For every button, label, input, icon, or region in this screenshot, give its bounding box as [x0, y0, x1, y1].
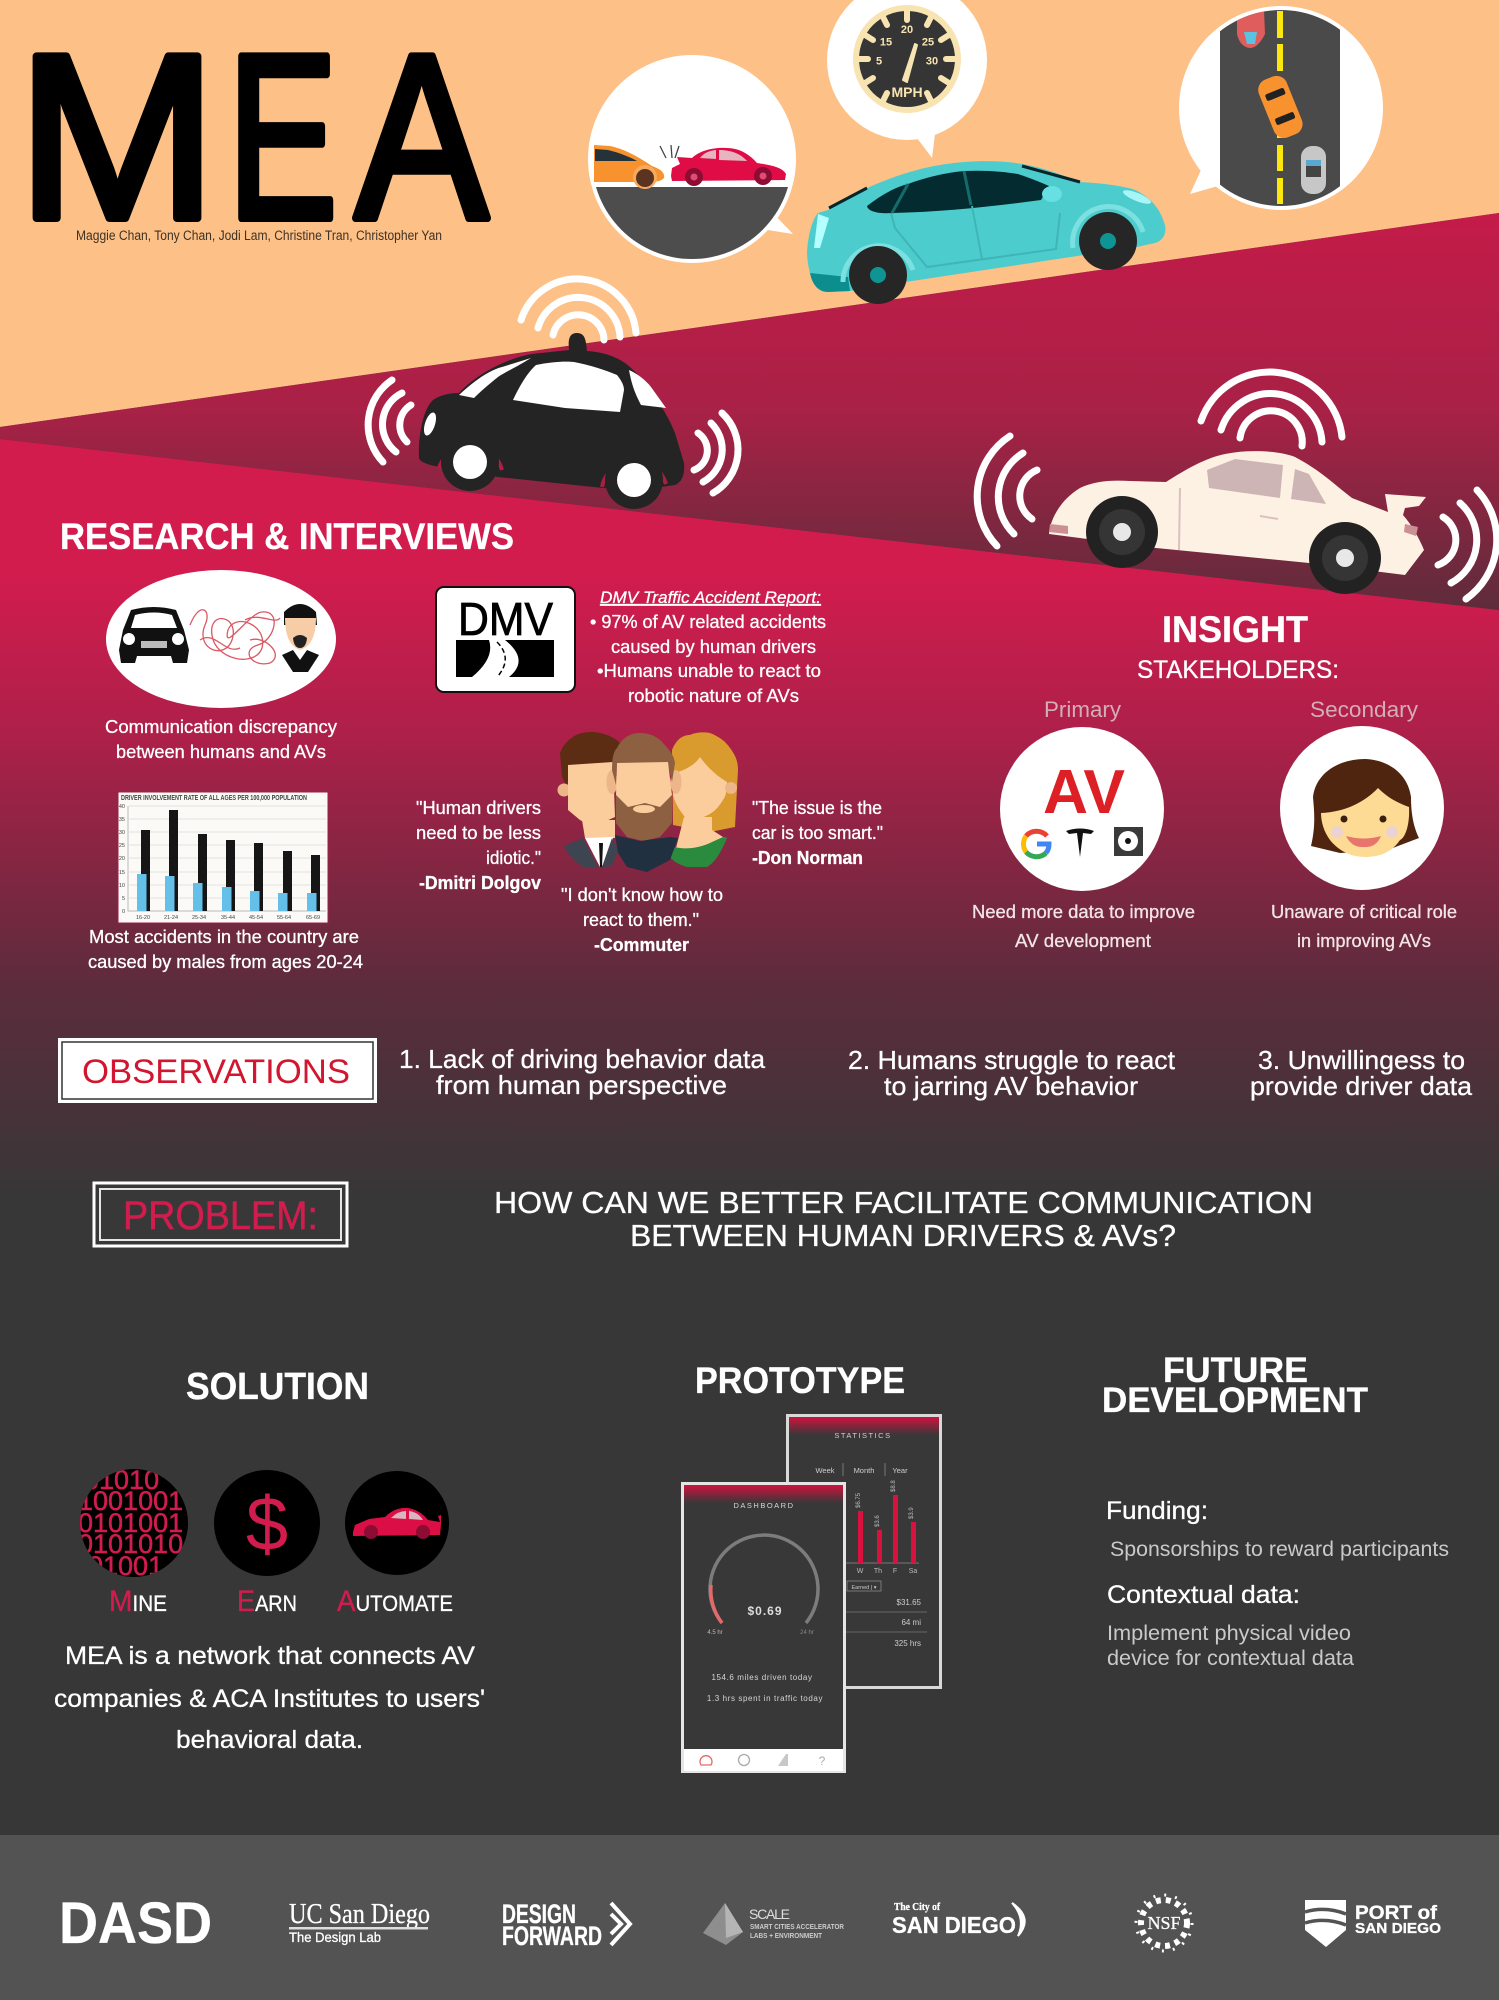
logo: Port of San Diego [1305, 1900, 1441, 1947]
bar chart: driver involvement: 30 [119, 830, 125, 836]
logo: DASD: DASD [59, 1891, 212, 1956]
quote: commuter: react to them." [583, 910, 699, 930]
text: DMV report [590, 588, 826, 706]
phone: statistics screen: $31.65 [897, 1598, 922, 1607]
text: communication discrepancy [105, 717, 337, 762]
icon: earn dollar: $ [246, 1482, 288, 1567]
observation 1: 1. Lack of driving behavior data [399, 1044, 766, 1074]
icon: speedometer speech bubble: MPH [891, 84, 923, 100]
logo: Design Forward [502, 1899, 630, 1951]
icon: mine binary: 0101001 [78, 1508, 183, 1538]
quote: Dmitri Dolgov: need to be less [416, 823, 541, 843]
bar chart: driver involvement [118, 792, 328, 923]
title: A [355, 5, 488, 268]
icon: DMV logo: DMV [458, 593, 553, 645]
text: DMV report: •Humans unable to react to [597, 661, 821, 681]
phone: statistics screen: Th [874, 1568, 882, 1575]
logo: UC San Diego [289, 1898, 430, 1945]
bar chart: driver involvement: 40 [119, 804, 125, 810]
icon: mine binary [78, 1465, 188, 1581]
bar chart: driver involvement: 45-54 [249, 915, 263, 921]
text: secondary caption: Unaware of critical role [1271, 902, 1457, 922]
quote: Don Norman: "The issue is the [752, 798, 882, 818]
text: primary caption: AV development [1015, 931, 1151, 951]
text: DMV report: caused by human drivers [611, 637, 816, 657]
icon: speedometer speech bubble: 30 [926, 56, 938, 68]
text: solution description: MEA is a network that connects AV [65, 1642, 475, 1670]
title: M [17, 5, 217, 268]
text: chart caption: Most accidents in the country are [89, 927, 359, 947]
phone: dashboard screen: ? [819, 1754, 826, 1768]
bar chart: driver involvement: 25-34 [192, 915, 206, 921]
phone: statistics screen: W [857, 1568, 864, 1575]
icon: speedometer speech bubble: 25 [922, 36, 934, 48]
heading: research and interviews: RESEARCH & INTERVIEWS [60, 516, 514, 557]
phone: statistics screen: 325 hrs [894, 1639, 921, 1648]
phone: dashboard screen: 154.6 miles driven today [711, 1673, 813, 1682]
bar chart: driver involvement: 25 [119, 843, 125, 849]
icon: speedometer speech bubble: 15 [880, 36, 892, 48]
bar chart: driver involvement: DRIVER INVOLVEMENT RATE OF ALL AGES PER 100,000 POPULATION [121, 795, 307, 802]
quote: commuter [561, 885, 723, 955]
logo: Design Forward: FORWARD [502, 1921, 602, 1951]
quote: Dmitri Dolgov: "Human drivers [416, 798, 541, 818]
icon: mine binary: 01010 [84, 1465, 159, 1495]
text: DMV report: • 97% of AV related accidents [590, 612, 826, 632]
logo: City of San Diego: The City of [894, 1901, 940, 1913]
heading: future development [1102, 1351, 1368, 1420]
phone: statistics screen: $3.6 [875, 1515, 881, 1527]
phone: statistics screen: F [893, 1568, 897, 1575]
heading: future development: DEVELOPMENT [1102, 1381, 1368, 1420]
text: solution description [54, 1642, 485, 1754]
icon: crash speech bubble [588, 55, 798, 267]
phone: statistics screen: $6.75 [856, 1492, 862, 1508]
phone: dashboard screen: $0.69 [747, 1604, 783, 1618]
icon: autonomous black car [368, 279, 738, 509]
quote: Dmitri Dolgov: idiotic." [486, 848, 541, 868]
logo: Scale: SCALE [749, 1906, 792, 1922]
phone: statistics screen: Sa [909, 1568, 917, 1575]
logo: Port of San Diego: SAN DIEGO [1355, 1920, 1441, 1937]
icon: road speech bubble [1179, 0, 1383, 210]
observation 1: from human perspective [436, 1070, 727, 1100]
text: secondary caption [1271, 902, 1457, 951]
phone: dashboard screen: DASHBOARD [733, 1501, 795, 1510]
logo: NSF: NSF [1147, 1913, 1181, 1933]
logo: City of San Diego: SAN DIEGO [892, 1912, 1016, 1938]
quote: Don Norman: -Don Norman [752, 848, 863, 868]
text: DMV report: robotic nature of AVs [628, 686, 799, 706]
stakeholder: primary: AV [1043, 758, 1125, 827]
logo: City of San Diego [892, 1901, 1025, 1938]
phone: dashboard screen [682, 1484, 844, 1772]
authors: Maggie Chan, Tony Chan, Jodi Lam, Christine Tran, Christopher Yan [76, 228, 442, 243]
heading: insight: STAKEHOLDERS: [1137, 656, 1339, 684]
bar chart: driver involvement: 21-24 [164, 915, 178, 921]
quote: commuter: -Commuter [594, 935, 689, 955]
icon: mine binary: 1001001 [78, 1486, 183, 1516]
observation 2: to jarring AV behavior [884, 1071, 1138, 1101]
logo: Design Forward: DESIGN [502, 1899, 576, 1929]
logo: Scale [703, 1903, 844, 1945]
text: contextual data: Implement physical video [1107, 1622, 1351, 1645]
observation 2 [848, 1045, 1176, 1101]
phone: statistics screen: STATISTICS [834, 1431, 892, 1440]
text: communication discrepancy: Communication discrepancy [105, 717, 337, 737]
problem statement [494, 1185, 1313, 1253]
label: mine: MINE [109, 1585, 167, 1618]
icon: white race car [977, 372, 1497, 599]
logo: Port of San Diego: PORT of [1355, 1903, 1438, 1924]
text: funding [1106, 1497, 1449, 1561]
logo: UC San Diego: UC San Diego [289, 1898, 430, 1930]
text: primary caption: Need more data to improve [972, 902, 1195, 922]
logo: Scale: SMART CITIES ACCELERATOR [750, 1924, 844, 1931]
peach header [0, 0, 1499, 427]
text: funding: Sponsorships to reward participants [1110, 1538, 1449, 1561]
bar chart: driver involvement: 35-44 [221, 915, 235, 921]
icon: mine binary: 0101010 [78, 1529, 183, 1559]
logo: Scale: LABS + ENVIRONMENT [750, 1933, 823, 1940]
icon: speedometer speech bubble: 5 [876, 56, 882, 68]
bar chart: driver involvement: 35 [119, 817, 125, 823]
phone: dashboard screen: 24 hr [800, 1630, 814, 1636]
problem label box: PROBLEM: [123, 1194, 318, 1238]
problem label box [94, 1183, 347, 1246]
phone: statistics screen: Earned | ▾ [852, 1585, 877, 1591]
heading: insight [1137, 609, 1339, 684]
icon: mine binary: 01001 [88, 1551, 163, 1581]
phone: statistics screen: Year [892, 1466, 908, 1475]
text: chart caption [88, 927, 363, 972]
text: solution description: companies & ACA Institutes to users' [54, 1685, 485, 1713]
icon: speedometer speech bubble [827, 0, 987, 158]
bar chart: driver involvement: 5 [122, 896, 125, 902]
text: DMV report: DMV Traffic Accident Report: [600, 588, 821, 607]
crimson gradient section [0, 439, 1499, 1200]
bar chart: driver involvement: 10 [119, 883, 125, 889]
dark crimson diagonal band [0, 213, 1499, 610]
text: contextual data [1107, 1581, 1354, 1670]
phone: statistics screen: $8.8 [891, 1480, 897, 1492]
logo: NSF [1136, 1895, 1192, 1951]
label: automate: AUTOMATE [337, 1585, 453, 1618]
stakeholder: secondary [1280, 697, 1444, 890]
quote: Dmitri Dolgov: -Dmitri Dolgov [419, 873, 541, 893]
icon: communication oval [106, 570, 336, 708]
icon: DMV logo [436, 587, 575, 692]
icon: automate car [345, 1471, 449, 1575]
stakeholder: primary: Primary [1044, 697, 1121, 722]
text: primary caption [972, 902, 1195, 951]
bar chart: driver involvement: 15 [119, 870, 125, 876]
observations label box [58, 1038, 377, 1103]
bar chart: driver involvement: 55-64 [277, 915, 291, 921]
text: solution description: behavioral data. [176, 1726, 363, 1754]
text: contextual data: Contextual data: [1107, 1581, 1300, 1609]
observations label box: OBSERVATIONS [82, 1053, 350, 1091]
phone: statistics screen [788, 1416, 940, 1688]
text: communication discrepancy: between humans and AVs [116, 742, 326, 762]
observation 3 [1250, 1045, 1473, 1101]
text: contextual data: device for contextual data [1107, 1647, 1354, 1670]
icon: earn dollar [214, 1470, 320, 1576]
label: earn: EARN [237, 1585, 297, 1618]
icon: three people [558, 732, 738, 872]
text: chart caption: caused by males from ages 20-24 [88, 952, 363, 972]
heading: solution: SOLUTION [186, 1366, 369, 1408]
phone: statistics screen: Week [815, 1466, 835, 1475]
heading: future development: FUTURE [1163, 1351, 1308, 1390]
quote: Don Norman [752, 798, 883, 868]
phone: dashboard screen: 1.3 hrs spent in traffic today [707, 1694, 823, 1703]
text: funding: Funding: [1106, 1497, 1208, 1525]
quote: Dmitri Dolgov [416, 798, 541, 893]
text: secondary caption: in improving AVs [1297, 931, 1431, 951]
title: E [228, 5, 338, 268]
phone: dashboard screen: 4.5 hr [707, 1630, 723, 1636]
phone: statistics screen: Month [854, 1466, 874, 1475]
bar chart: driver involvement: 65-69 [306, 915, 320, 921]
title [17, 5, 488, 268]
heading: insight: INSIGHT [1162, 609, 1308, 650]
observation 3: provide driver data [1250, 1071, 1473, 1101]
heading: prototype: PROTOTYPE [695, 1360, 905, 1401]
stakeholder: secondary: Secondary [1310, 697, 1418, 722]
stakeholder: primary [1000, 697, 1164, 891]
problem statement: BETWEEN HUMAN DRIVERS & AVs? [630, 1218, 1176, 1253]
problem statement: HOW CAN WE BETTER FACILITATE COMMUNICATION [494, 1185, 1313, 1220]
bar chart: driver involvement: 20 [119, 856, 125, 862]
icon: teal car [807, 161, 1165, 304]
bar chart: driver involvement: 16-20 [136, 915, 150, 921]
observation 2: 2. Humans struggle to react [848, 1045, 1176, 1075]
icon: speedometer speech bubble: 20 [901, 24, 913, 36]
bar chart: driver involvement: 0 [122, 909, 125, 915]
phone: statistics screen: $3.9 [909, 1507, 915, 1519]
observation 1 [399, 1044, 766, 1100]
phone: statistics screen: 64 mi [901, 1618, 921, 1627]
observation 3: 3. Unwillingess to [1258, 1045, 1465, 1075]
quote: Don Norman: car is too smart." [752, 823, 883, 843]
quote: commuter: "I don't know how to [561, 885, 723, 905]
logo: UC San Diego: The Design Lab [289, 1929, 381, 1945]
footer band [0, 1835, 1499, 2000]
